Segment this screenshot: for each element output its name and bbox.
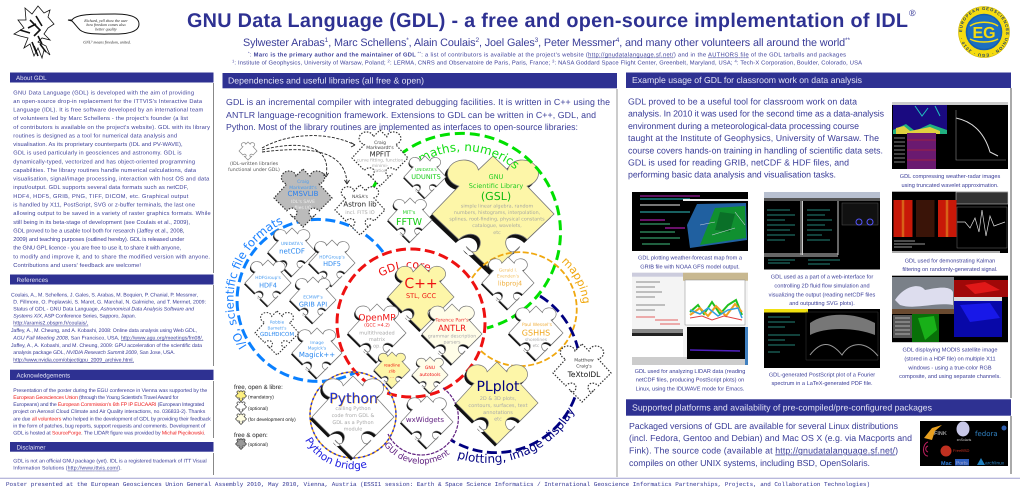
text block: about: HDF4, HDF5, GRIB, PNG, TIFF, DICOM, etc. Graphical output	[13, 193, 189, 200]
piece: PLplot	[454, 362, 538, 446]
text block: about: to modify and improve it, and to share the modified version with anyone.	[13, 253, 210, 260]
text block: about: capabilities. The library routines handle numerical calculations, data	[13, 167, 197, 174]
piece: netCDF: UNIDATA's	[281, 241, 304, 247]
piece: Python: code from GDL &	[332, 413, 375, 419]
piece: GDLffDICOM: Robbie	[270, 320, 285, 324]
piece: Magick++	[291, 328, 342, 380]
piece: GSHHS: Paul Wessel's	[522, 322, 553, 328]
text block: about: dynamically-typed, vectorized and has object-oriented programming	[13, 158, 195, 165]
heading: about: About GDL	[16, 75, 47, 82]
text block: about: visualisation, signal/image processing, interaction with host OS and data	[13, 176, 210, 183]
piece: CMSVLIB: files I/O	[294, 205, 312, 211]
text block: references: D. Fillmore, O. Poplawski, S. Maret, G. Marchal, N. Galmiche, and T. Mermet, 2009:	[13, 299, 206, 305]
heading: dependencies: Dependencies and useful libraries (all free & open)	[228, 76, 424, 86]
text block: platforms: Fink). The source code (available at http://gnudatalanguage.sf.net/)	[629, 446, 898, 456]
icon: GNU head with speech bubble: Richard, yell show the user	[83, 18, 128, 23]
piece: C++	[386, 264, 454, 332]
piece: GNU Scientific Library: simple linear algebra, random	[461, 204, 533, 210]
icon: GNU head with speech bubble	[14, 6, 139, 58]
author notes: :	[250, 52, 253, 58]
authors: , and many other volunteers all around the world	[619, 37, 845, 49]
piece: netCDF	[267, 228, 316, 277]
caption: web interface	[769, 274, 876, 307]
piece: GDLffDICOM: GDLffDICOM	[260, 331, 294, 338]
piece: Magick++: Magick++	[299, 351, 335, 359]
text block: dependencies intro: GDL is an incremental compiler with integrated debugging facilities. It is written in C++ using the	[226, 97, 610, 107]
affiliations: : LERMA, CNRS and Observatoire de Paris, Paris, France;	[390, 60, 552, 66]
piece: ANTLR: grammar description	[428, 334, 476, 340]
arc: GDL core	[337, 249, 485, 397]
panel: supported platforms	[626, 399, 1011, 474]
caption: Fourier: spectrum in a LaTeX-generated PDF file.	[771, 380, 873, 387]
piece: readline	[373, 352, 410, 389]
text block: about: of volunteers led by Marc Schellens - the project's founder (a list	[13, 115, 188, 122]
piece: OpenMP: (GCC >4.2)	[364, 322, 390, 328]
piece: GSHHS: GSHHS	[522, 328, 550, 338]
arc: maths, numerics	[372, 133, 560, 328]
text block: references: Jaffey, A., M. Cheung, and A. Kobashi, 2008: Online data analysis using Web GDL,	[11, 328, 197, 334]
authors: 2	[475, 37, 479, 44]
piece: libproj4	[481, 257, 534, 311]
text block: acknowledgements: are due all volunteers who helped in the development of GDL by providing their feedback	[13, 416, 211, 422]
piece: CMSVLIB	[274, 169, 332, 227]
piece: UDUNITS: UNIDATA's	[415, 167, 437, 172]
caption: forecast map: GRIB file with NOAA GFS model output.	[640, 263, 740, 270]
piece: PLplot: PLplot	[476, 379, 520, 395]
note: IDL-written libraries: functional under GDL)	[228, 167, 280, 173]
logos: Linux and BSD distributions: fedora	[975, 430, 998, 438]
piece: HDF4: HDFGroup's	[255, 275, 282, 281]
heading: acknowledgements: Acknowledgements	[16, 372, 70, 380]
piece: MPFIT: minimi-	[372, 163, 389, 169]
piece: HDF4	[244, 260, 291, 307]
text block: acknowledgements: project on Aerosol Cloud Climate and Air Quality interactions, no. 036833-2). Thanks	[13, 409, 206, 415]
legend item: mandatory: (mandatory)	[248, 394, 274, 400]
piece: GRIB API: ECMWF's	[303, 294, 324, 300]
text block: references	[11, 292, 206, 363]
author notes: Marc is the primary author and the maintainer of GDL	[254, 52, 416, 58]
caption: LIDAR	[635, 368, 745, 392]
heading: example usage	[626, 72, 1011, 88]
logos: Linux and BSD distributions: FINK	[934, 431, 947, 437]
piece: GNU autotools	[411, 357, 448, 394]
logos: Linux and BSD distributions: Mac	[941, 461, 952, 467]
piece: PLplot: annotations	[483, 410, 513, 416]
piece: GRIB API	[289, 277, 336, 324]
text block: about: is handled by X11, PostScript, SVG or z-buffer terminals, the last one	[13, 202, 195, 208]
caption: web interface: and outputting SVG plots).	[789, 300, 855, 307]
heading: dependencies	[222, 73, 617, 88]
legend item: optional: (optional)	[248, 406, 268, 412]
text block: about: GDL is used particularly in geosciences and astronomy. GDL is	[13, 150, 182, 157]
heading: disclaimer: Disclaimer	[16, 444, 45, 452]
piece: HDF5: HDFGroup's	[319, 254, 346, 260]
heading: supported platforms	[626, 399, 1011, 416]
authors: , Joel Gales	[479, 37, 535, 49]
piece: ANTLR: parsers	[443, 340, 461, 346]
piece: OpenMP: OpenMP	[358, 314, 396, 324]
text block: about: 2009) and teaching purposes (outlined hereby). GDL is released under	[13, 236, 184, 243]
caption: Fourier	[769, 371, 875, 387]
figure: MODIS satellite screenshot	[892, 276, 1008, 342]
panel: about GDL	[10, 72, 214, 273]
piece: C++: STL, GCC	[406, 292, 436, 300]
piece: libproj4: Evenden's	[497, 274, 520, 280]
arc label: GDL core: GDL core	[378, 262, 430, 276]
piece: GNU Scientific Library: catalogue, wavelets,	[472, 223, 522, 229]
caption: MODIS: (stored in a HDF file) on multiple X11	[904, 355, 996, 362]
piece: PLplot: contours, surfaces, text	[468, 403, 528, 409]
piece: FFTW: FFTW	[396, 217, 423, 228]
footer rule and text: Poster presented at the European Geosciences Union General Assembly 2010, May 2010, Vienna, Austria (ESSI1 session: Earth & Space Science Informatics / International Geoscience Informatics Partnerships, Projects, and Collaboration Technologies)	[6, 481, 870, 488]
piece: GNU Scientific Library: (GSL)	[481, 190, 511, 203]
affiliations: 2	[388, 58, 391, 64]
arc label: I/O: I/O, scientific file formats	[225, 218, 282, 350]
piece: Python: Python	[329, 391, 378, 407]
text block: acknowledgements: in the form of patches, bug reports, support requests and comments. Development of	[13, 424, 206, 430]
note: IDL-written libraries: (IDL-written libraries	[230, 161, 279, 167]
arc label: maths: maths, numerics	[418, 144, 518, 169]
text block: classroom: analysis. In 2010 it was used for the second time as a data-analysis	[628, 108, 885, 118]
heading: disclaimer	[10, 442, 214, 452]
caption: MODIS: composite, and using separate channels.	[899, 373, 1001, 380]
text block: references: AGU Fall Meeting 2008, San Francisco, USA, http://www.agu.org/meetings/fm08/.	[12, 335, 203, 341]
piece: GNU Scientific Library: Scientific Library	[469, 182, 523, 190]
piece: FFTW	[387, 198, 432, 243]
registered mark: ®	[909, 8, 916, 18]
piece: Python	[310, 376, 394, 460]
piece: libproj4: libproj4	[498, 280, 522, 288]
piece: MPFIT: MPFIT	[370, 150, 391, 158]
caption: web interface: controlling 2D fluid flow simulation and	[774, 283, 870, 290]
figure: weather forecast map screenshot	[632, 192, 748, 251]
piece: GDLffDICOM	[255, 311, 299, 355]
heading: references	[10, 274, 214, 284]
piece: CMSVLIB: CMSVLIB	[288, 190, 319, 198]
text block: disclaimer: Information Solutions (http://www.ittvis.com/).	[13, 466, 122, 472]
authors: 3	[535, 37, 539, 44]
authors: Sylwester Arabas	[243, 37, 325, 49]
legend item: optional gray: (optional)	[248, 442, 268, 448]
piece: readline: readline	[384, 362, 401, 368]
arc label: plotting: plotting, image display	[457, 407, 575, 465]
text block: about: GNU Data Language (GDL) is developed with the aim of providing	[13, 89, 194, 96]
piece: GNU Scientific Library	[429, 156, 554, 275]
icon: GNU head with speech bubble: better quality	[95, 26, 117, 32]
authors: *	[406, 37, 409, 44]
authors: , Alain Coulais	[409, 37, 476, 49]
heading: example usage: Example usage of GDL for classroom work on data analysis	[632, 75, 863, 85]
piece: HDF4: HDF4	[259, 282, 277, 290]
caption: radar	[900, 173, 1000, 189]
icon: EGU logo: EG	[972, 25, 996, 42]
piece: MPFIT: Craig	[374, 140, 386, 146]
text block: classroom: performing basic data analysis and visualisation tasks.	[628, 170, 836, 180]
author notes: *	[248, 50, 250, 56]
piece: readline: ...	[390, 374, 394, 379]
text block: dependencies intro: Python. Most of the library routines are implemented as interfaces to open-source libraries:	[226, 122, 578, 132]
piece: netCDF: netCDF	[279, 248, 305, 256]
piece: TeXtoIDL: TeXtoIDL	[567, 370, 601, 379]
text block: platforms: compiles on other UNIX systems, including BSD, OpenSolaris.	[629, 458, 870, 468]
caption: forecast map	[638, 255, 743, 270]
text block: about: the GNU GPL licence - you are free to use it, to share it with anyone,	[13, 245, 181, 252]
piece: Astron lib: NASA's	[352, 194, 369, 200]
icon: EGU logo: EUROPEAN GEOSCIENCES UNION · EGU · 2010 ·	[959, 7, 1009, 57]
piece: TeXtoIDL	[553, 344, 611, 402]
caption: Kalman	[902, 257, 998, 273]
piece: wxWidgets: wxWidgets	[406, 416, 444, 424]
piece: wxWidgets	[400, 396, 453, 450]
text block: references: http://aramis2.obspm.fr/coulais/,	[13, 321, 88, 327]
piece: ANTLR	[421, 304, 482, 366]
figure: LIDAR screenshot	[632, 273, 748, 365]
authors: 4	[616, 37, 620, 44]
caption: MODIS: windows - using a true-color RGB	[907, 364, 992, 371]
text block: classroom: GDL proved to be a useful tool for classroom work on data	[628, 96, 857, 106]
text block: acknowledgements: Presentation of the poster during the EGU conference in Vienna was supported by the	[13, 388, 207, 394]
text block: classroom	[628, 96, 885, 180]
logos: Linux and BSD distributions	[920, 421, 1008, 467]
arc: plotting, image display	[451, 296, 580, 453]
text block: about: GDL proved to be a usable tool both for research (Jaffey et al., 2008,	[13, 227, 185, 234]
text block: classroom: taught at the Institute of Geophysics, University of Warsaw. The	[628, 133, 879, 143]
text block: platforms	[629, 421, 912, 468]
piece: readline: zlib	[389, 368, 396, 374]
text block: references: Systems XIX, ASP Conference Series, Sapporo, Japan.	[13, 314, 136, 320]
text block: about: of contributors is available on the project's website). GDL with its library	[13, 124, 210, 131]
piece: Python: calling Python	[335, 406, 371, 412]
text block: about	[13, 89, 211, 269]
panel: disclaimer	[10, 442, 214, 475]
piece: GNU autotools: autotools	[420, 372, 441, 378]
caption: Kalman: filtering on randomly-generated signal.	[902, 266, 998, 273]
piece: ANTLR: Terence Parr's	[434, 318, 469, 324]
caption: LIDAR: Linux, using the IDLWAVE mode for Emacs.	[636, 385, 745, 392]
piece: ANTLR: ANTLR	[438, 324, 466, 334]
text block: acknowledgements: European Geosciences Union (through the Young Scientist's Travel Award for	[13, 395, 179, 401]
piece: CMSVLIB: Craig	[297, 179, 309, 185]
arc: I/O, scientific file formats	[237, 219, 383, 381]
caption: forecast map: GDL plotting weather-forecast map from a	[638, 255, 743, 262]
piece: GNU Scientific Library: GNU	[489, 173, 504, 181]
title: GNU Data Language (GDL) - a free and open-source implementation of IDL	[187, 10, 908, 32]
text block: acknowledgements: Europeans) and the European Commission's 6th FP IP EUCAARI (European Integrated	[13, 402, 204, 408]
caption: web interface: visualizing the output (reading netCDF files	[769, 291, 876, 298]
text block: about: allowing output to be saved in a variety of raster graphics formats. While	[13, 210, 211, 217]
piece: CMSVLIB: Markwardt's	[289, 185, 317, 191]
text block: references: http://www.nvidia.com/object/gpu_2009_archive.html.	[13, 357, 134, 363]
text block: dependencies intro: ANTLR language-recognition framework. Extensions to GDL can be written in C++, GDL, and	[226, 110, 596, 120]
text block: dependencies intro	[226, 97, 610, 132]
piece: TeXtoIDL: Matthew	[574, 358, 594, 364]
piece: libproj4: Gerald I.	[499, 268, 517, 274]
piece: GNU autotools: GNU	[425, 365, 435, 371]
piece: CMSVLIB: IDL's SAVE	[291, 199, 315, 205]
text block: platforms: Packaged versions of GDL are available for several Linux distributions	[629, 421, 899, 431]
piece: GSHHS	[508, 306, 563, 362]
panel: acknowledgements	[10, 370, 214, 438]
piece: Python: Python	[330, 392, 378, 408]
arc: mapping	[472, 252, 577, 366]
arc: GUI development	[388, 388, 458, 455]
piece: MPFIT: zation	[373, 168, 387, 174]
author notes: http://gnudatalanguage.sf.net/) and in the AUTHORS file of the GDL tarballs and packages	[588, 52, 846, 58]
piece: UDUNITS: UDUNITS	[411, 173, 441, 181]
piece: OpenMP	[347, 304, 406, 364]
piece: MPFIT: Markwardt's	[366, 145, 394, 151]
arc label: Python bridge: Python bridge	[306, 437, 367, 472]
logos: Linux and BSD distributions: Ports	[956, 460, 968, 466]
piece: C++: C++	[404, 276, 438, 292]
affiliations: : Tech-X Corporation, Boulder, Colorado, USA	[737, 60, 862, 66]
piece: Astron lib: Astron lib	[343, 200, 377, 208]
piece: Magick++: Magick's	[308, 346, 327, 352]
text block: references: analysis package GDL, NVIDIA Research Summit 2009, San Jose, USA.	[13, 350, 175, 356]
piece: HDF5	[308, 240, 355, 287]
caption: LIDAR: GDL used for analyzing LIDAR data (reading	[635, 368, 745, 375]
piece: UDUNITS	[403, 156, 446, 199]
text block: about: Contributions and users' feedback are welcome!	[13, 262, 141, 269]
caption: LIDAR: netCDF files, producing PostScript plots) on	[636, 377, 744, 384]
piece: MPFIT	[352, 130, 408, 186]
affiliations: : NASA Goddard Space Flight Center, Greenbelt, Maryland, USA;	[555, 60, 734, 66]
figure: weather radar screenshot	[892, 102, 1008, 169]
caption: MODIS: GDL displaying MODIS satellite image	[903, 346, 997, 353]
caption: radar: GDL compressing weather-radar images	[900, 173, 1000, 180]
text block: about: input/output. GDL supports several data formats such as netCDF,	[13, 184, 189, 191]
piece: Magick++: Image	[310, 340, 324, 346]
text block: about: routines is designed as a tool for numerical data analysis and	[13, 132, 177, 140]
text block: about: Language (IDL). It is free software developed by an international team	[13, 107, 204, 114]
text block: references: Coulais, A., M. Schellens, J. Gales, S. Arabas, M. Boquien, P. Chanial, P. Messmer,	[11, 292, 198, 298]
legend: free & open:	[234, 432, 268, 439]
text block: disclaimer	[13, 459, 207, 472]
author notes: **	[416, 50, 421, 56]
affiliations: 3	[552, 58, 555, 64]
affiliations: 4	[735, 58, 738, 64]
arc: Python bridge	[310, 372, 396, 458]
legend item: development only: (for development only)	[248, 417, 296, 423]
logos: Linux and BSD distributions: FreeBSD	[953, 448, 970, 453]
piece: GDLffDICOM: Barnett's	[268, 326, 286, 330]
piece: Python: GDL as a Python	[332, 420, 374, 426]
piece: PLplot: etc	[494, 416, 502, 422]
panel: dependencies and libraries	[222, 73, 618, 477]
piece: PLplot: 2D & 3D plots,	[480, 396, 517, 402]
logos: Linux and BSD distributions: enSolaris	[957, 438, 972, 442]
piece: Astron lib	[335, 185, 385, 235]
affiliations: : Institute of Geophysics, University of Warsaw, Poland;	[234, 60, 387, 66]
caption: Kalman: GDL used for demonstrating Kalman	[905, 257, 995, 264]
piece: OpenMP: multithreaded	[359, 330, 395, 336]
author notes: : a list of contributors is available at the project's website (	[421, 52, 588, 58]
text block: acknowledgements: GDL is hosted at SourceForge. The LIDAR figure was provided by Michał Pięcikowski.	[13, 431, 205, 437]
piece: GSHHS: etc	[533, 343, 540, 349]
caption: web interface: GDL used as a part of a web-interface for	[771, 274, 873, 281]
heading: supported platforms: Supported platforms and availability of pre-compiled/pre-configured packages	[632, 402, 933, 412]
text block: platforms: (incl. Fedora, Gentoo and Debian) and Mac OS X (e.g. via Macports and	[629, 433, 912, 443]
authors: 1	[325, 37, 329, 44]
authors: **	[845, 37, 850, 44]
figure: Kalman filter screenshot	[892, 192, 1008, 253]
heading: about	[10, 72, 214, 82]
heading: acknowledgements	[10, 370, 214, 380]
dashed arrows	[262, 136, 355, 184]
text block: references: Jaffey, A., A. Kobashi, and M. Cheung, 2009: GPU acceleration of the scientific data	[11, 343, 202, 349]
affiliations: 1	[232, 58, 235, 64]
text block: acknowledgements	[13, 388, 211, 437]
piece: OpenMP: op.	[373, 344, 381, 350]
text block: about: still being in its beta-stage of development (see Coulais et al., 2009),	[13, 219, 190, 226]
heading: references: References	[16, 277, 48, 284]
piece: GNU Scientific Library: splines, root-finding, physical constants	[449, 216, 545, 222]
figure: web interface screenshot	[764, 192, 880, 270]
caption: MODIS	[899, 346, 1001, 380]
authors: , Peter Messmer	[538, 37, 616, 49]
arc label: mapping: mapping	[562, 258, 589, 303]
text block: classroom: course covers hands-on training in handling of scientific data sets.	[628, 146, 883, 156]
piece: GNU Scientific Library: numbers, histograms, interpolation,	[454, 210, 541, 216]
caption: radar: using truncated wavelet approximation.	[901, 182, 999, 189]
piece: GRIB API: GRIB API	[299, 300, 327, 308]
text block: classroom: GDL is used for reading GRIB, netCDF & HDF files, and	[628, 158, 849, 168]
panel: references	[10, 274, 214, 366]
piece: HDF5: HDF5	[323, 260, 341, 268]
icon: GNU head with speech bubble: GNU' means freedom, united.	[83, 40, 131, 44]
text block: classroom: environment during a meteorological-data processing course	[628, 121, 859, 131]
piece: Astron lib: incl. FITS IO	[345, 210, 375, 216]
piece: Python: module	[344, 426, 362, 432]
caption: Fourier: GDL-generated PostScript plot of a Fourier	[769, 371, 875, 378]
piece: FFTW: MIT's	[403, 210, 416, 216]
text block: references: Status of GDL - GNU Data Language, Astronomical Data Analysis Software and	[13, 307, 195, 313]
note: IDL-written libraries	[228, 142, 280, 173]
piece: OpenMP: matrix	[369, 337, 385, 343]
piece: TeXtoIDL: Craig's	[576, 364, 592, 370]
piece: MPFIT: curve fitting, function	[357, 158, 403, 164]
piece: GNU Scientific Library: etc	[493, 230, 501, 236]
legend: free, open & libre:	[234, 384, 283, 391]
logos: Linux and BSD distributions: archlinux	[985, 460, 1005, 466]
authors: , Marc Schellens	[328, 37, 407, 49]
text block: about: visualisation. As its proprietary counterparts (IDL and PV-WAVE),	[13, 141, 183, 148]
figure: Fourier spectrum screenshot	[764, 309, 880, 368]
legend	[234, 384, 296, 450]
piece: GSHHS: shorelines	[525, 337, 548, 343]
arc label: GUI: GUI development	[385, 442, 450, 466]
text block: about: an open-source drop-in replacement for the ITTVIS's Interactive Data	[13, 98, 203, 105]
panel: classroom example	[626, 72, 1011, 398]
icon: GNU head with speech bubble: how freedom comes also	[86, 22, 126, 27]
text block: disclaimer: GDL is not an official GNU package (yet). IDL is a registered trademark of ITT Visual	[13, 459, 207, 465]
